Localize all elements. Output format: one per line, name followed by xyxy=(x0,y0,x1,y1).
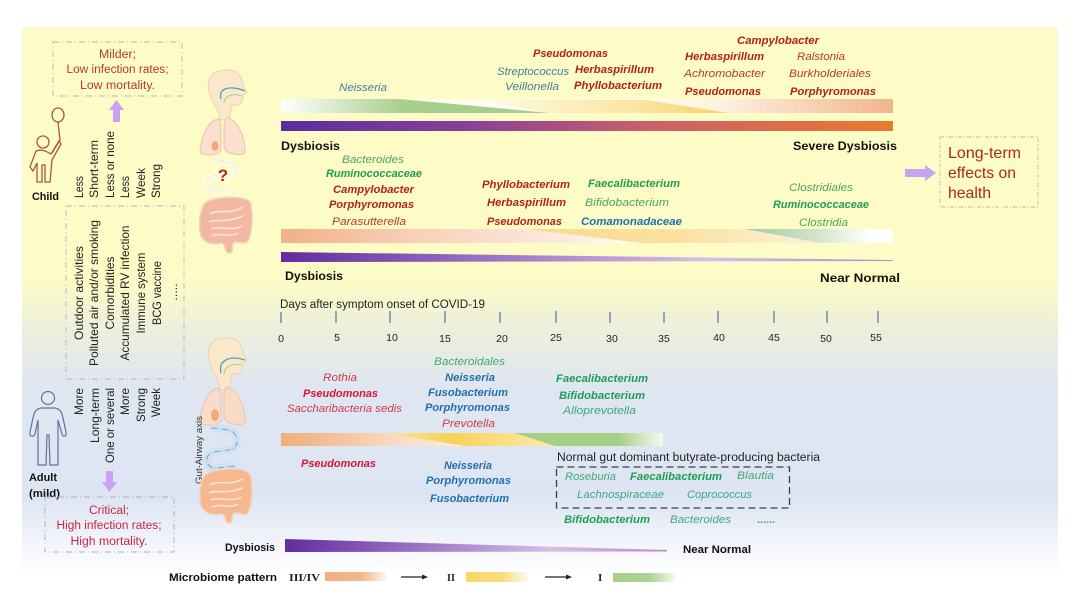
heading: normal gut bacteria: Normal gut dominant butyrate-producing bacteria xyxy=(557,452,821,464)
timeline axis: 40 xyxy=(713,332,725,344)
label: gut-airway axis: Gut-Airway axis xyxy=(194,415,204,484)
other gut bacteria: ...... xyxy=(757,514,775,526)
adult factor values: One or several xyxy=(103,388,117,463)
panel: risk factors: Outdoor activities xyxy=(72,246,86,340)
label: dysbiosis airway: Dysbiosis xyxy=(281,139,340,153)
airway taxa labels: Ralstonia xyxy=(797,51,845,63)
arrow: down to adult outcome xyxy=(102,471,117,492)
adult airway taxa labels: Alloprevotella xyxy=(562,405,636,417)
timeline axis: 5 xyxy=(334,332,340,344)
airway taxa labels: Herbaspirillum xyxy=(685,51,764,63)
child factor values: Short-term xyxy=(87,140,101,198)
dashed box: butyrate-producing bacteria: Roseburia xyxy=(565,471,616,483)
callout: long-term effects: health xyxy=(948,185,991,202)
callout: child outcome xyxy=(53,42,182,96)
callout: long-term effects xyxy=(940,137,1038,207)
label: adult (mild): Adult xyxy=(29,472,57,484)
timeline axis: 55 xyxy=(870,332,882,344)
timeline axis: 30 xyxy=(606,333,618,345)
gut microbiome pattern bar xyxy=(281,229,893,243)
adult airway taxa labels: Porphyromonas xyxy=(425,402,510,414)
legend: microbiome pattern: III/IV xyxy=(289,572,320,584)
timeline axis: 25 xyxy=(550,332,562,344)
adult airway taxa labels: Bifidobacterium xyxy=(559,390,645,402)
adult airway taxa labels: Rothia xyxy=(323,372,357,384)
adult factor values: Strong xyxy=(134,388,148,422)
label: dysbiosis adult: Dysbiosis xyxy=(225,542,275,554)
dashed box: butyrate-producing bacteria: Faecalibacterium xyxy=(630,471,722,483)
adult factor values: Week xyxy=(149,387,163,417)
label: child: Child xyxy=(32,191,59,203)
child factor values: Less or none xyxy=(103,131,117,198)
gut taxa labels: Herbaspirillum xyxy=(487,197,566,209)
callout: adult outcome: High mortality. xyxy=(70,536,148,548)
gut dysbiosis wedge xyxy=(281,252,893,262)
icon: gut-airway connecting tubes xyxy=(207,428,237,468)
dashed box: butyrate-producing bacteria: Lachnospiraceae xyxy=(577,489,664,501)
airway taxa labels: Pseudomonas xyxy=(685,86,761,98)
callout: adult outcome xyxy=(45,497,174,552)
icon: adult intestine xyxy=(200,469,252,523)
label: near normal adult: Near Normal xyxy=(683,544,751,556)
adult factor values: Long-term xyxy=(88,388,102,443)
gut taxa labels: Phyllobacterium xyxy=(482,179,570,191)
gut taxa labels: Campylobacter xyxy=(333,184,415,196)
child factor values xyxy=(72,131,163,198)
timeline axis: 20 xyxy=(496,333,508,345)
icon: child airway and lungs xyxy=(200,70,247,155)
adult factor values xyxy=(72,387,163,463)
airway taxa labels: Achromobacter xyxy=(683,68,766,80)
adult airway taxa labels: Fusobacterium xyxy=(428,387,508,399)
airway taxa labels: Neisseria xyxy=(339,82,387,94)
panel: risk factors: Accumulated RV infection xyxy=(118,226,132,360)
airway taxa labels xyxy=(339,35,876,98)
adult airway taxa labels: Prevotella xyxy=(442,418,495,430)
gut taxa labels: Pseudomonas xyxy=(487,216,562,228)
gut taxa labels: Faecalibacterium xyxy=(588,178,680,190)
timeline axis: 45 xyxy=(768,332,780,344)
legend: microbiome pattern: I xyxy=(598,572,602,584)
airway taxa labels: Campylobacter xyxy=(737,35,820,47)
timeline title: Days after symptom onset of COVID-19 xyxy=(280,299,485,311)
icon: adult airway and lungs xyxy=(200,338,247,425)
gut taxa labels: Ruminococcaceae xyxy=(326,168,422,180)
gut taxa labels: Clostridiales xyxy=(789,182,854,194)
child factor values: Week xyxy=(134,167,148,198)
legend: microbiome pattern: Microbiome pattern xyxy=(169,572,277,584)
callout: adult outcome: Critical; xyxy=(89,505,129,517)
icon: child intestine xyxy=(200,197,252,253)
panel: risk factors: Polluted air and/or smoking xyxy=(87,220,101,366)
airway taxa labels: Burkholderiales xyxy=(789,68,872,80)
legend: microbiome pattern: II xyxy=(447,572,455,584)
label: dysbiosis gut: Dysbiosis xyxy=(285,269,343,283)
child factor values: Strong xyxy=(149,164,163,198)
label: adult (mild) xyxy=(29,472,60,500)
airway taxa labels: Streptococcus xyxy=(497,66,570,78)
panel: risk factors: ..... xyxy=(166,284,180,300)
adult airway taxa labels: Saccharibacteria sedis xyxy=(287,403,403,415)
timeline axis: 15 xyxy=(439,333,451,345)
icon: question mark between lungs and gut: ? xyxy=(218,166,228,185)
airway dysbiosis severity bar xyxy=(281,121,893,131)
gut taxa labels: Clostridia xyxy=(799,217,848,229)
arrow: to long-term effects xyxy=(905,165,936,181)
airway taxa labels: Veillonella xyxy=(505,81,559,93)
adult factor values: More xyxy=(72,388,86,415)
airway microbiome pattern bar xyxy=(281,99,893,113)
timeline axis: 10 xyxy=(386,332,398,344)
adult airway taxa labels xyxy=(287,356,648,430)
adult gut taxa labels xyxy=(301,458,511,505)
adult airway taxa labels: Faecalibacterium xyxy=(556,373,648,385)
timeline axis: 50 xyxy=(820,333,832,345)
timeline axis xyxy=(278,311,1045,345)
icon: child with balloon xyxy=(30,108,64,182)
child factor values: Less xyxy=(118,176,132,198)
callout: long-term effects: Long-term xyxy=(948,145,1021,162)
other gut bacteria: Bifidobacterium xyxy=(564,514,650,526)
icon: adult xyxy=(30,392,66,465)
adult factor values: More xyxy=(118,388,132,415)
gut taxa labels xyxy=(326,154,869,229)
panel: risk factors: Comorbidities xyxy=(103,256,117,330)
label: adult (mild): (mild) xyxy=(29,488,60,500)
adult gut taxa labels: Fusobacterium xyxy=(430,493,509,505)
adult gut taxa labels: Pseudomonas xyxy=(301,458,376,470)
adult airway taxa labels: Neisseria xyxy=(445,372,495,384)
child factor values: Less xyxy=(72,176,86,198)
dashed box: butyrate-producing bacteria: Coprococcus xyxy=(687,489,752,501)
timeline axis: 35 xyxy=(658,333,670,345)
gut taxa labels: Comamonadaceae xyxy=(581,216,682,228)
gut taxa labels: Porphyromonas xyxy=(329,199,414,211)
adult gut taxa labels: Neisseria xyxy=(444,460,492,472)
arrow: up to child outcome xyxy=(109,100,124,122)
callout: child outcome: Milder; xyxy=(99,49,136,61)
callout: child outcome: Low infection rates; xyxy=(66,64,168,76)
panel: risk factors xyxy=(66,206,184,379)
adult airway taxa labels: Bacteroidales xyxy=(434,356,506,368)
gut taxa labels: Ruminococcaceae xyxy=(773,199,869,211)
legend: microbiome pattern xyxy=(169,572,675,584)
airway taxa labels: Herbaspirillum xyxy=(575,64,654,76)
adult gut taxa labels: Porphyromonas xyxy=(426,475,511,487)
adult dysbiosis wedge xyxy=(285,539,667,552)
dashed box: butyrate-producing bacteria: Blautia xyxy=(737,470,774,482)
label: severe dysbiosis: Severe Dysbiosis xyxy=(793,139,897,153)
dashed box: butyrate-producing bacteria xyxy=(556,467,790,508)
adult airway taxa labels: Pseudomonas xyxy=(303,388,378,400)
gut taxa labels: Parasutterella xyxy=(332,216,406,228)
airway taxa labels: Phyllobacterium xyxy=(574,80,662,92)
panel: risk factors: BCG vaccine xyxy=(150,261,164,325)
callout: child outcome: Low mortality. xyxy=(80,80,155,92)
gut taxa labels: Bacteroides xyxy=(342,154,405,166)
icon: question mark between lungs and gut xyxy=(207,160,236,192)
panel: risk factors: Immune system xyxy=(134,252,148,334)
airway taxa labels: Porphyromonas xyxy=(790,86,876,98)
callout: long-term effects: effects on xyxy=(948,165,1016,182)
adult microbiome pattern bar xyxy=(281,433,663,446)
label: near normal gut: Near Normal xyxy=(820,271,900,285)
other gut bacteria xyxy=(564,514,775,526)
callout: adult outcome: High infection rates; xyxy=(56,520,162,532)
gut taxa labels: Bifidobacterium xyxy=(585,197,669,209)
timeline axis: 0 xyxy=(278,333,284,345)
other gut bacteria: Bacteroides xyxy=(670,514,732,526)
airway taxa labels: Pseudomonas xyxy=(533,48,608,60)
